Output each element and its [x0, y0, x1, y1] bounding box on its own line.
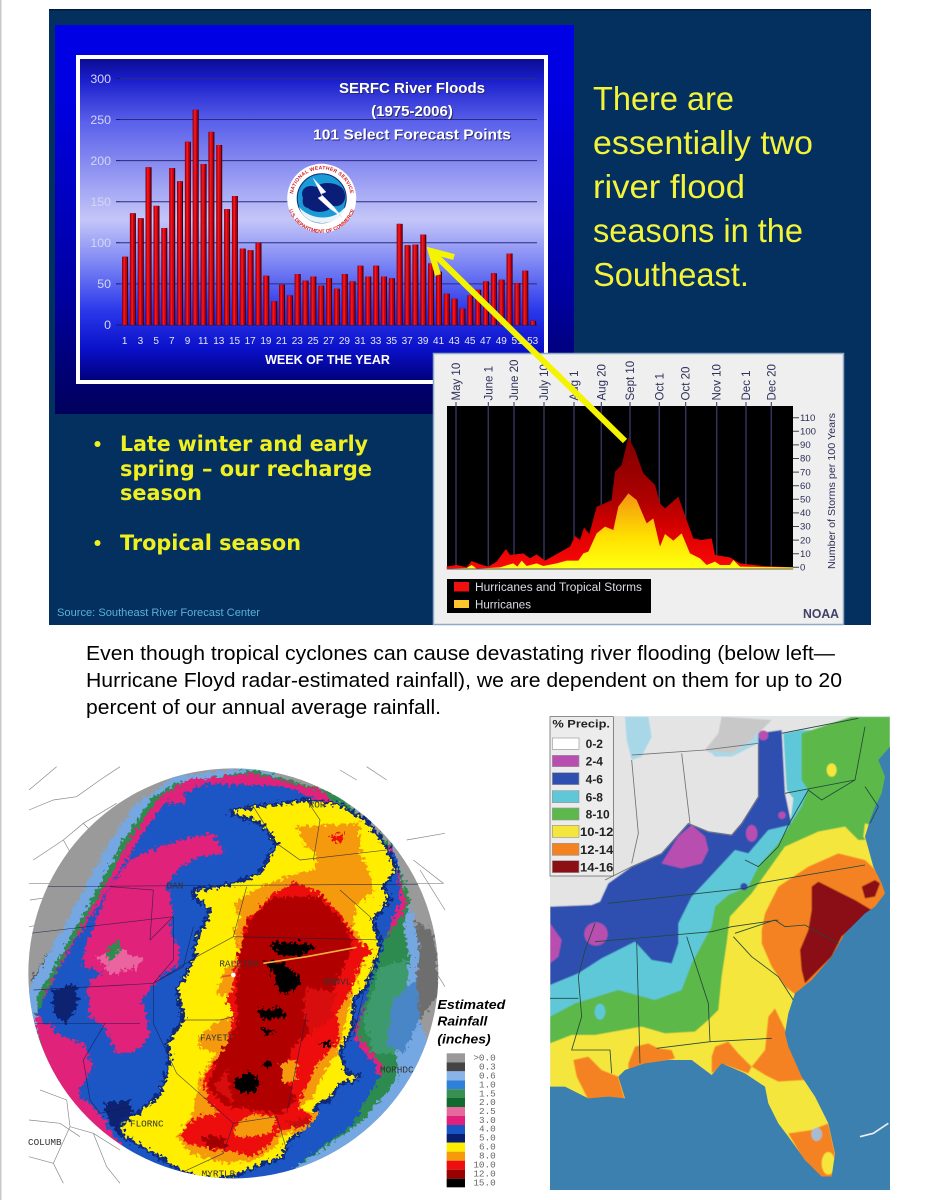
x axis labels: 19: [260, 336, 272, 347]
arrow: storm peak to fall flood peak: [430, 250, 625, 441]
right axis values: 0: [800, 562, 805, 574]
heading: two flood seasons: Southeast.: [593, 256, 749, 293]
x axis labels: 41: [433, 336, 445, 347]
right axis values: [793, 413, 816, 574]
legend: percent precipitation: 2-4: [586, 754, 603, 768]
place labels: DAN: [167, 881, 183, 892]
state and county boundaries: [29, 800, 443, 1173]
legend title: estimated rainfall: [437, 997, 506, 1046]
label: Columbia: COLUMB: [28, 1137, 62, 1148]
y axis labels: [90, 72, 111, 332]
legend: percent precipitation: 6-8: [586, 790, 603, 804]
legend: rainfall scale: 2.0: [479, 1097, 496, 1108]
chart title: SERFC River Floods: [340, 81, 486, 98]
label: Morehead: MORHDC: [380, 1065, 414, 1076]
right axis title: Number of Storms per 100 Years: [827, 413, 838, 569]
x axis labels: 15: [229, 336, 240, 347]
heading: two flood seasons: There are: [593, 80, 734, 117]
x axis labels: 27: [323, 336, 335, 347]
month labels: Oct 20: [681, 367, 693, 400]
bullet list: seasons: Tropical season: [120, 531, 301, 555]
legend: rainfall scale: 8.0: [479, 1150, 496, 1161]
legend: percent precipitation: [550, 717, 614, 876]
heading: two flood seasons: essentially two: [593, 124, 813, 161]
x axis labels: 23: [292, 336, 303, 347]
bullet list: seasons: season: [120, 481, 202, 505]
x axis labels: 29: [339, 336, 350, 347]
chart title: (1975-2006): [372, 104, 454, 121]
x axis labels: 25: [307, 336, 319, 347]
x axis labels: 51: [511, 336, 523, 347]
x axis labels: 49: [496, 336, 507, 347]
legend: rainfall scale: 0.6: [479, 1070, 496, 1081]
month labels: Dec 1: [741, 370, 753, 400]
month labels: May 10: [451, 363, 463, 400]
place labels: GRNVL: [323, 977, 352, 988]
month labels: Dec 20: [766, 364, 778, 400]
x axis labels: 21: [276, 336, 288, 347]
x axis labels: 43: [449, 336, 460, 347]
right axis values: 100: [800, 426, 816, 438]
bullet list: seasons: [94, 432, 372, 555]
legend: rainfall scale: 4.0: [479, 1124, 496, 1135]
panel: river flood chart: [55, 25, 574, 414]
chart title: SERFC River Floods: [339, 80, 485, 97]
x axis labels: 5: [153, 336, 159, 347]
icon: National Weather Service logo: U.S. DEPARTMENT OF COMMERCE: [290, 208, 354, 233]
y axis labels: 200: [90, 154, 111, 168]
NOAA credit: NOAA: [803, 606, 840, 621]
chart title: (1975-2006): [371, 103, 453, 120]
y axis labels: 150: [90, 195, 111, 209]
basemap county lines: [29, 767, 445, 1183]
right axis values: 10: [800, 549, 811, 560]
legend: [447, 579, 651, 613]
legend: rainfall scale: 15.0: [473, 1177, 496, 1188]
month labels: June 1: [483, 366, 495, 400]
month labels: June 20: [509, 360, 521, 400]
x axis labels: 1: [122, 336, 128, 347]
state boundaries: [550, 718, 878, 1073]
x axis labels: 39: [417, 336, 429, 347]
x axis labels: 45: [464, 336, 476, 347]
white Bahamas marks: [860, 1123, 888, 1137]
legend: rainfall scale: 10.0: [473, 1159, 496, 1170]
panel: Hurricane Floyd radar rainfall map: [20, 760, 506, 1193]
heading: two flood seasons: [593, 80, 813, 293]
legend: rainfall scale: 6.0: [479, 1142, 496, 1153]
right axis values: 90: [800, 440, 811, 451]
right axis values: 50: [800, 494, 811, 506]
bars: floods by week: [124, 110, 533, 325]
right axis values: 80: [800, 454, 811, 465]
x axis labels: 37: [402, 336, 413, 347]
legend: percent precipitation: 8-10: [586, 808, 610, 822]
x axis labels: 3: [138, 336, 144, 347]
panel: NOAA storm frequency chart: [434, 354, 844, 624]
right axis values: 70: [800, 467, 811, 478]
panel: percent of annual precipitation map: [545, 710, 912, 1190]
chart title: 101 Select Forecast Points: [313, 126, 511, 144]
month labels: Sept 10: [625, 361, 637, 400]
heading: two flood seasons: seasons in the: [593, 212, 803, 249]
chart title: 101 Select Forecast Points: [314, 128, 512, 144]
x axis labels: 35: [386, 336, 397, 347]
right axis values: 30: [800, 522, 811, 533]
bullet list: seasons: Late winter and early: [120, 432, 368, 456]
legend: rainfall scale: 5.0: [479, 1133, 496, 1144]
legend: Hurricanes and Tropical Storms: [475, 582, 642, 594]
y axis labels: 100: [90, 236, 111, 250]
source note: Source: Southeast River Forecast Center: [57, 607, 260, 619]
panel: slide background: [49, 9, 871, 626]
radar rainfall circle: [28, 768, 438, 1178]
legend title: estimated rainfall: (inches): [437, 1031, 491, 1046]
x axis title: WEEK OF THE YEAR: [265, 353, 390, 367]
place labels: FLORNC: [130, 1119, 164, 1130]
legend: percent precipitation: 12-14: [580, 843, 614, 857]
month labels: Oct 1: [654, 373, 666, 400]
x axis labels: 31: [355, 336, 366, 347]
place labels: FAYETT: [200, 1033, 234, 1044]
legend: rainfall scale: 12.0: [473, 1168, 496, 1179]
x axis labels: 17: [245, 336, 256, 347]
page edge line: [0, 0, 2, 1200]
month labels: July 10: [539, 364, 551, 400]
x axis labels: 53: [527, 336, 539, 347]
month labels: [451, 360, 778, 400]
body text paragraph: Even though tropical cyclones can cause devastating river flooding (below left—: [86, 643, 835, 665]
body text paragraph: [86, 643, 842, 719]
right axis values: 20: [800, 535, 811, 546]
legend title: estimated rainfall: Rainfall: [437, 1014, 488, 1029]
legend: percent precipitation: 14-16: [580, 860, 614, 874]
icon: National Weather Service logo: NATIONAL WEATHER SERVICE: [290, 166, 354, 194]
place labels: RALEIGH: [219, 959, 259, 970]
icon: National Weather Service logo: [287, 164, 356, 233]
legend: rainfall scale: 0.3: [479, 1061, 496, 1072]
bullet list: seasons: spring – our recharge: [120, 457, 372, 481]
x axis labels: 13: [213, 336, 225, 347]
body text paragraph: percent of our annual average rainfall.: [86, 697, 441, 719]
legend title: estimated rainfall: Estimated: [437, 997, 506, 1012]
legend: percent precipitation: % Precip.: [552, 718, 610, 730]
y axis labels: 250: [90, 113, 111, 127]
right axis values: 40: [800, 508, 811, 519]
legend: Hurricanes: [475, 600, 531, 612]
legend: rainfall scale: 1.0: [479, 1079, 496, 1090]
legend: percent precipitation: 0-2: [586, 737, 603, 751]
body text paragraph: Hurricane Floyd radar-estimated rainfall), we are dependent on them for up to 20: [86, 670, 842, 692]
legend: rainfall scale: 3.0: [479, 1115, 496, 1126]
x axis labels: 9: [185, 336, 191, 347]
place labels: ORF: [415, 847, 432, 858]
legend: rainfall scale: >0.0: [473, 1053, 496, 1064]
y axis labels: 300: [90, 72, 111, 86]
x axis labels: 47: [480, 336, 492, 347]
legend: rainfall scale: [447, 1053, 496, 1188]
legend: rainfall scale: 1.5: [479, 1088, 496, 1099]
month labels: Aug 20: [596, 364, 608, 400]
month labels: Aug 1: [569, 370, 581, 400]
place labels: MYRTLB: [202, 1169, 236, 1180]
place labels: [130, 802, 351, 1176]
legend: percent precipitation: 4-6: [586, 772, 603, 786]
place labels: ROH: [309, 799, 325, 810]
x axis labels: 7: [169, 336, 175, 347]
legend: rainfall scale: 2.5: [479, 1106, 496, 1117]
legend: percent precipitation: 10-12: [580, 825, 614, 839]
x axis labels: [122, 336, 539, 347]
month labels: Nov 10: [712, 364, 724, 400]
x axis labels: 33: [370, 336, 382, 347]
y axis labels: 0: [104, 318, 111, 332]
x axis labels: 11: [198, 336, 209, 347]
y axis labels: 50: [97, 277, 111, 291]
right axis values: 110: [800, 413, 815, 424]
right axis values: 60: [800, 481, 811, 492]
chart: storm area: [447, 437, 793, 569]
heading: two flood seasons: river flood: [593, 168, 745, 205]
chart title: [313, 80, 512, 144]
